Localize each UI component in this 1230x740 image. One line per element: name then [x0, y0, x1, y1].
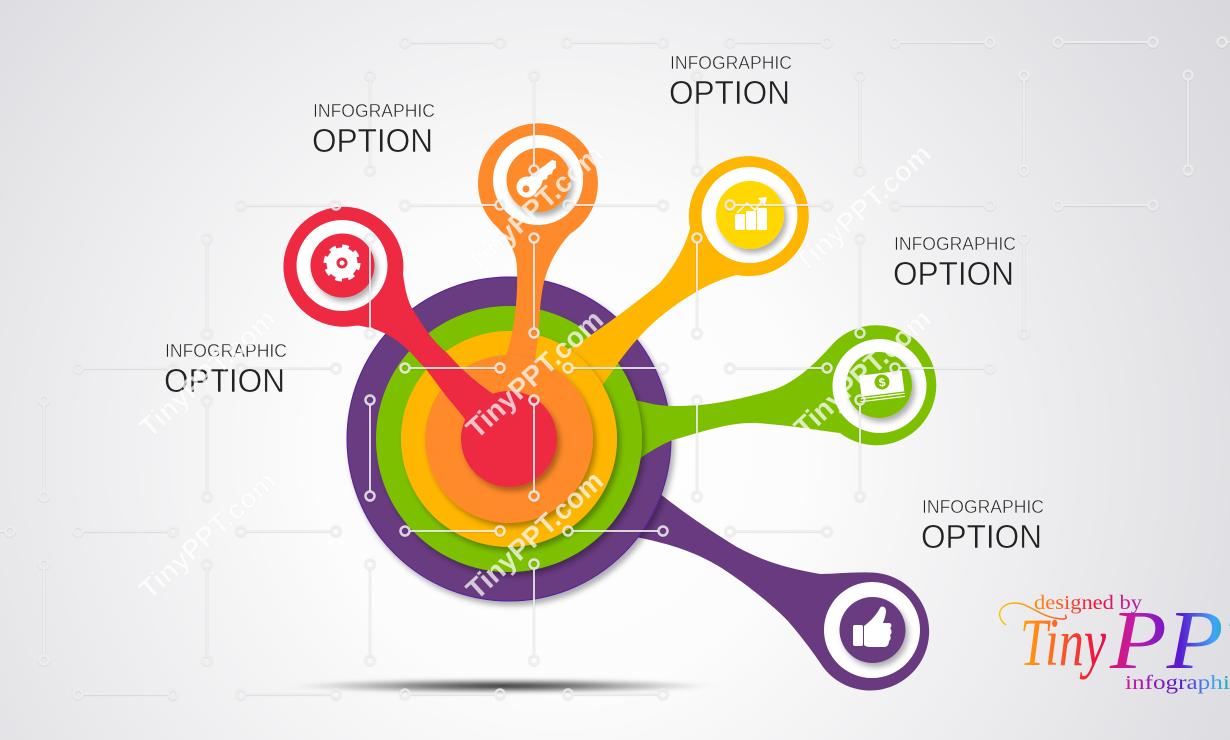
arm and ring: yellow: [401, 156, 809, 547]
watermarks: TinyPPT.com: [460, 138, 609, 278]
label: option right: [893, 234, 1016, 292]
arm and ring: purple: [347, 277, 929, 690]
icon badge: thumbs up: [824, 582, 920, 678]
label: option left: INFOGRAPHIC: [165, 341, 287, 361]
label: option right: INFOGRAPHIC: [894, 234, 1016, 254]
designer logo: designed by: [1034, 592, 1142, 614]
watermarks: TinyPPT.com: [460, 304, 609, 444]
watermarks: [133, 138, 937, 605]
icon badge: money: [832, 339, 926, 433]
label: option top left: INFOGRAPHIC: [313, 101, 435, 121]
icon badge: gear: [296, 220, 388, 311]
watermarks: TinyPPT.com: [133, 465, 282, 605]
label: option top left: OPTION: [312, 122, 433, 159]
watermarks: TinyPPT.com: [788, 138, 937, 278]
designer logo: [1000, 592, 1230, 694]
arm and ring: green: [376, 306, 936, 572]
arm and ring: red: [283, 207, 557, 487]
arm and ring: orange: [425, 123, 598, 523]
concentric rings with arms: [283, 123, 936, 691]
designer logo: infographic: [1125, 672, 1230, 694]
icon badge: key: [493, 135, 583, 225]
label: option top: INFOGRAPHIC: [670, 53, 792, 73]
label: option left: [164, 341, 287, 399]
designer logo: Tiny: [1020, 604, 1107, 680]
label: option top: [669, 53, 792, 111]
label: option lower right: [921, 497, 1044, 555]
label: option top left: [312, 101, 435, 159]
label: option lower right: INFOGRAPHIC: [922, 497, 1044, 517]
ground shadow: [291, 678, 715, 694]
label: option top: OPTION: [669, 74, 790, 111]
icon badge: chart: [702, 167, 798, 263]
watermarks: TinyPPT.com: [788, 303, 937, 443]
label: option right: OPTION: [893, 255, 1014, 292]
watermarks: TinyPPT.com: [133, 303, 282, 443]
label: option left: OPTION: [164, 362, 285, 399]
icon badge: money: $: [878, 375, 887, 390]
label: option lower right: OPTION: [921, 518, 1042, 555]
watermarks: TinyPPT.com: [460, 465, 609, 605]
